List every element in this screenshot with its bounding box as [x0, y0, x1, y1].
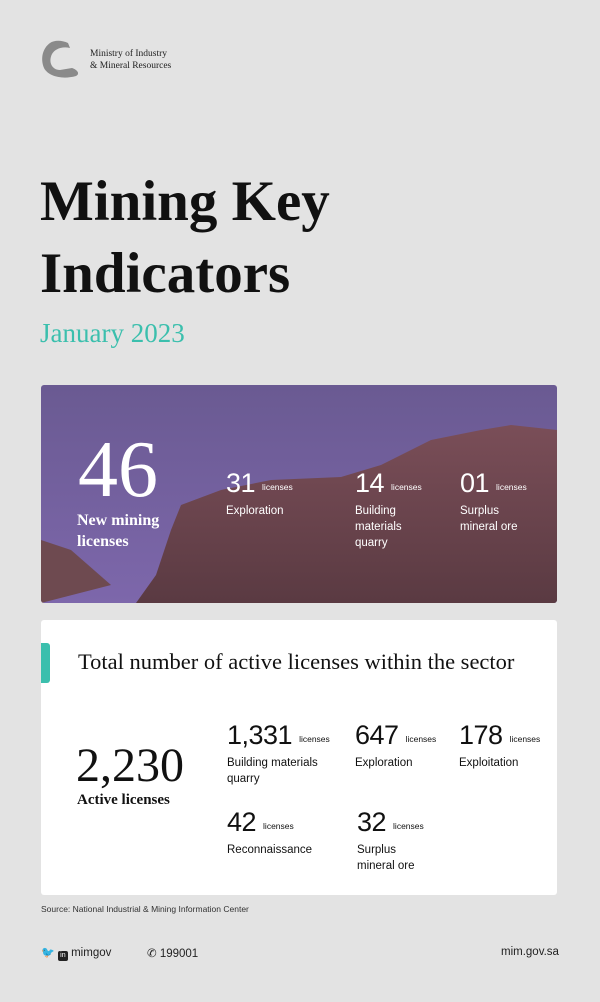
- subtitle date: January 2023: [40, 318, 185, 348]
- stat: exploration 647: 647 licenses: [355, 720, 436, 750]
- stat: exploitation 178: 178 licenses: [459, 720, 540, 750]
- stat: exploration 31: [226, 468, 293, 517]
- footer website: mim.gov.sa: [501, 946, 559, 958]
- title: [40, 170, 330, 305]
- stat: building 14: materials: [355, 521, 402, 533]
- icon: linkedin: in: [60, 952, 66, 959]
- logo text: [90, 49, 171, 71]
- panel: active licenses: [41, 620, 557, 895]
- stat: surplus 32: 32 licenses: [357, 807, 424, 837]
- stat: surplus 32: Surplus: [357, 844, 396, 856]
- stat: exploitation 178: Exploitation: [459, 757, 518, 769]
- panel heading: Total number of active licenses within the sector: [78, 649, 514, 674]
- stat: surplus 01: [460, 468, 527, 533]
- stat: surplus 32: mineral ore: [357, 860, 415, 872]
- stat: building 1,331: [227, 720, 330, 785]
- stat: surplus 01: mineral ore: [460, 521, 518, 533]
- stat: building 1,331: 1,331 licenses: [227, 720, 330, 750]
- background image: [41, 385, 557, 603]
- stat: building 14: [355, 468, 422, 549]
- title: Indicators: [40, 242, 290, 305]
- title: Mining Key: [40, 170, 330, 233]
- footer phone: ✆ 199001: [147, 948, 198, 960]
- logo: [42, 40, 171, 78]
- source note: Source: National Industrial & Mining Information Center: [41, 904, 249, 914]
- stat: exploration 647: Exploration: [355, 757, 413, 769]
- panel: new licenses hero: [41, 385, 557, 603]
- stat: exploration 31: 31 licenses: [226, 468, 293, 498]
- label: New mining licenses: licenses: [77, 533, 129, 550]
- stat: surplus 01: 01 licenses: [460, 468, 527, 498]
- big number 46: 46: [78, 426, 158, 514]
- stat: surplus 01: Surplus: [460, 505, 499, 517]
- stat: building 14: quarry: [355, 537, 388, 549]
- label: New mining licenses: New mining: [77, 512, 159, 529]
- stat: building 1,331: quarry: [227, 773, 260, 785]
- total 2,230: 2,230: [76, 739, 184, 792]
- accent tab: [41, 643, 50, 683]
- logo text: & Mineral Resources: [90, 61, 171, 71]
- stat: reconnaissance 42: Reconnaissance: [227, 844, 312, 856]
- label active licenses: Active licenses: [77, 792, 170, 808]
- stat: exploitation 178: [459, 720, 540, 769]
- stat: exploration 31: Exploration: [226, 505, 284, 517]
- stat: exploration 647: [355, 720, 436, 769]
- stat: building 14: Building: [355, 505, 396, 517]
- logo text: Ministry of Industry: [90, 49, 167, 59]
- icon: linkedin: [58, 951, 68, 961]
- stat: building 1,331: Building materials: [227, 757, 318, 769]
- icon: ministry logo: [42, 40, 78, 78]
- stat: building 14: 14 licenses: [355, 468, 422, 498]
- stat: reconnaissance 42: [227, 807, 312, 856]
- label: New mining licenses: [77, 512, 160, 550]
- stat: surplus 32: [357, 807, 424, 872]
- stat: reconnaissance 42: 42 licenses: [227, 807, 294, 837]
- footer social: 🐦 mimgov: [41, 947, 111, 959]
